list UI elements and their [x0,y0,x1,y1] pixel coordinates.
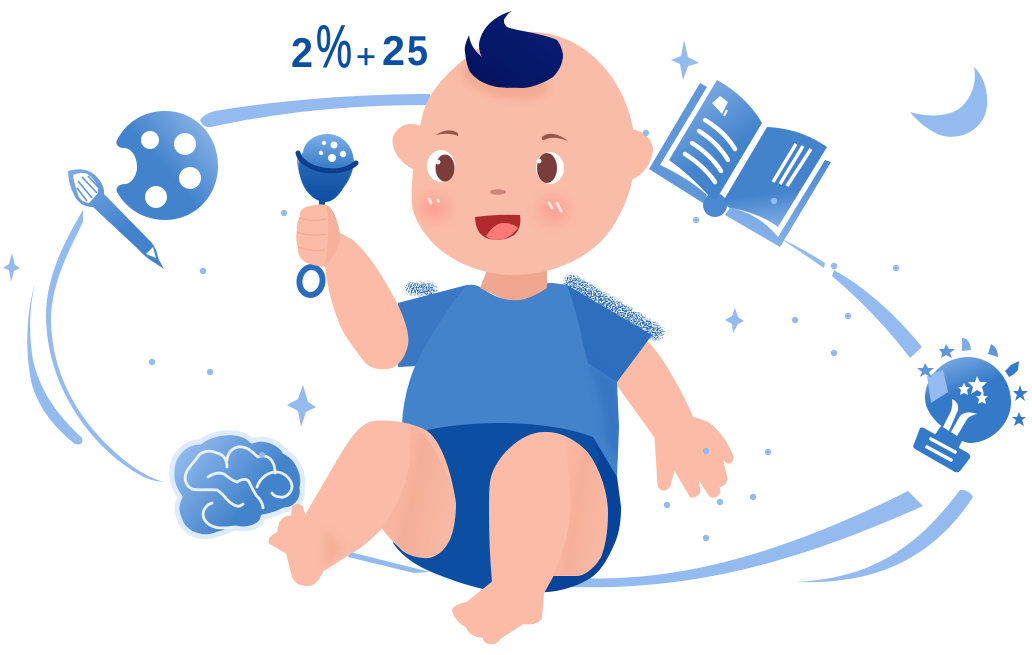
math formula: % [316,13,352,80]
math formula: 5 [407,27,428,74]
cheek highlights [429,199,561,211]
nose [490,189,506,195]
rattle [297,134,356,296]
math formula: 2 [382,27,405,74]
baby: ears [393,124,653,181]
icon: crescent moon [910,67,987,137]
right eye [536,152,564,184]
baby: left arm and hand [296,204,408,369]
icon: brain [172,433,303,537]
math formula: + [356,38,376,76]
cheeks [419,196,568,222]
baby: neck [480,268,547,300]
baby: head [412,11,635,275]
left page [669,80,762,200]
book covers [703,193,727,217]
baby: right leg and foot [453,433,607,643]
dots over figure [643,130,709,454]
baby: right arm and hand [617,335,732,496]
math formula [291,13,428,80]
baby: left leg and foot [270,422,455,585]
eyebrows [436,130,568,141]
mouth [475,215,520,240]
icon: paint brush [68,169,164,269]
hair [465,11,563,88]
scattered dots [149,210,899,541]
baby: diaper [393,423,621,593]
left eye [427,150,455,182]
icon: open book [649,80,831,247]
right page [722,127,827,227]
math formula: 2 [291,29,313,76]
icon: palette [116,111,218,220]
sparkles [3,40,744,427]
orbit swooshes [27,94,973,587]
icon: light bulb [913,338,1028,472]
baby: shirt [398,283,652,477]
baby: shoulder speckle texture [406,279,662,336]
